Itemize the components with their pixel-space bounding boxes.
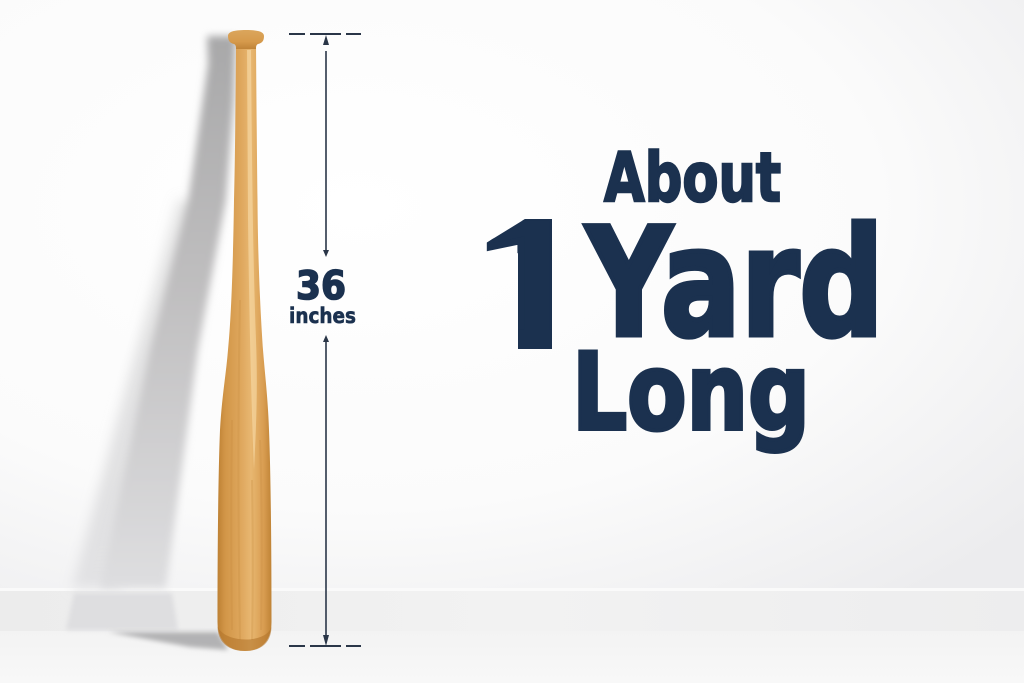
top tick: [289, 33, 361, 35]
wood grain: [231, 300, 262, 640]
measurement number: 36: [296, 264, 346, 309]
soft outer bat shadow on wall: [72, 200, 196, 588]
bat highlight: [247, 50, 257, 470]
top arrow: [323, 35, 329, 45]
bottom arrow: [323, 635, 329, 646]
baseboard: [0, 588, 1024, 631]
dimension line: 36 inches: [289, 34, 361, 646]
baseball bat: [218, 30, 272, 651]
headline: Yard: Yard: [584, 197, 884, 371]
upper arrow head: [323, 250, 329, 257]
bat knob: [228, 30, 264, 49]
bat end cap shading: [218, 626, 272, 651]
upper line: [325, 51, 327, 252]
bat shadow on wall: [100, 36, 236, 588]
bottom tick: [289, 645, 361, 647]
lower line: [325, 340, 327, 640]
bat shadow on baseboard: [66, 593, 178, 630]
headline: Long: Long: [572, 331, 810, 454]
floor: [0, 631, 1024, 683]
bat barrel and handle: [218, 44, 272, 651]
bat shadow on floor: [108, 632, 228, 650]
headline: About: About: [604, 139, 781, 218]
headline: 1: 1: [470, 181, 595, 393]
lower arrow head: [323, 335, 329, 342]
measurement unit: inches: [289, 304, 356, 328]
